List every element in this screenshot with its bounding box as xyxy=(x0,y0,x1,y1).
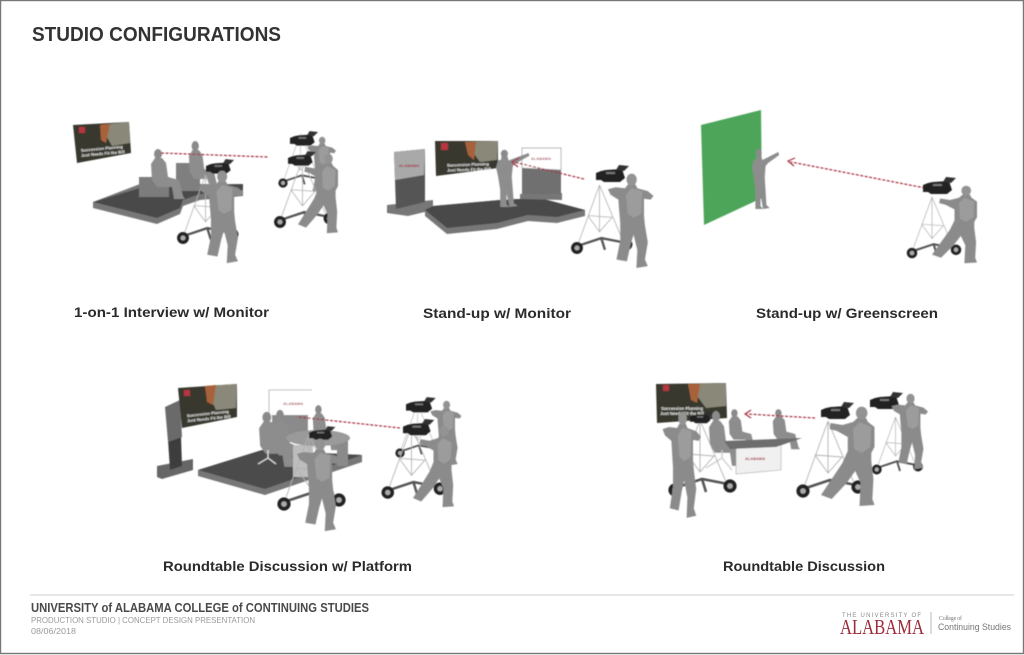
panel: stand-up with monitor scene xyxy=(387,141,654,268)
left monitor stand xyxy=(387,149,433,216)
monitor: Just Needs Fit the Bill xyxy=(660,411,704,416)
backdrop board xyxy=(269,390,312,435)
desk: ALABAMA xyxy=(745,456,765,461)
middle camera operator xyxy=(796,402,874,506)
platform xyxy=(425,198,585,234)
monitor: Succession Planning xyxy=(187,409,229,418)
monitor: Succession Planning xyxy=(661,406,703,411)
monitor xyxy=(178,384,237,428)
logo: University of Alabama: THE UNIVERSITY OF xyxy=(842,613,921,619)
right monitor stand xyxy=(520,148,562,200)
right rear camera operator xyxy=(870,392,928,474)
monitor xyxy=(73,122,131,163)
shot line xyxy=(161,153,268,157)
caption: Roundtable Discussion w/ Platform xyxy=(163,558,412,574)
caption: Stand-up w/ Monitor xyxy=(423,305,572,321)
armchairs xyxy=(139,163,200,197)
platform xyxy=(198,450,362,495)
panelists xyxy=(706,409,800,470)
footer date: 08/06/2018 xyxy=(31,626,76,636)
monitor xyxy=(656,383,727,423)
logo: University of Alabama xyxy=(840,612,1011,639)
panel: roundtable with platform scene xyxy=(157,384,462,531)
monitor xyxy=(435,141,498,176)
footer title: UNIVERSITY of ALABAMA COLLEGE of CONTINUING STUDIES xyxy=(31,601,369,615)
front camera operator xyxy=(177,159,244,263)
camera operator xyxy=(571,165,654,268)
camera operator xyxy=(907,177,977,263)
rear camera operators xyxy=(381,397,462,507)
desk xyxy=(724,438,802,474)
left monitor stand: ALABAMA xyxy=(399,163,419,168)
logo: University of Alabama: College of xyxy=(939,615,962,622)
monitor: Just Needs Fit the Bill xyxy=(187,414,231,423)
caption: Stand-up w/ Greenscreen xyxy=(756,305,938,321)
front camera operator xyxy=(277,426,346,531)
shot arrow xyxy=(512,158,584,179)
panel: stand-up with greenscreen scene xyxy=(701,110,977,263)
monitor stand xyxy=(157,400,193,479)
greenscreen xyxy=(701,110,762,225)
title: STUDIO CONFIGURATIONS xyxy=(32,24,281,46)
panelists and table xyxy=(258,405,350,477)
monitor: Just Needs Fit the Bill xyxy=(81,149,125,158)
backdrop board: ALABAMA xyxy=(283,401,303,406)
footer subtitle: PRODUCTION STUDIO | CONCEPT DESIGN PRESENTATION xyxy=(31,615,255,625)
shot line xyxy=(298,417,400,428)
platform xyxy=(93,184,243,224)
shot arrow xyxy=(788,158,925,188)
caption: Roundtable Discussion xyxy=(723,558,885,574)
monitor: Succession Planning xyxy=(447,161,490,168)
panel: roundtable scene xyxy=(656,383,928,518)
presenter xyxy=(496,150,530,207)
shot arrow xyxy=(745,410,815,418)
left camera operator xyxy=(663,411,737,518)
logo: University of Alabama: ALABAMA xyxy=(840,615,925,639)
footer rule xyxy=(30,594,1014,596)
monitor: Just Needs Fit the Bill xyxy=(447,166,491,173)
presenter xyxy=(752,149,779,209)
caption: 1-on-1 Interview w/ Monitor xyxy=(74,304,270,320)
rear camera operators xyxy=(274,131,338,233)
monitor: Succession Planning xyxy=(81,144,124,153)
right monitor stand: ALABAMA xyxy=(531,156,551,161)
seated guests xyxy=(151,141,220,199)
panel: 1-on-1 interview scene xyxy=(73,122,338,263)
logo: University of Alabama: Continuing Studies xyxy=(938,622,1011,633)
